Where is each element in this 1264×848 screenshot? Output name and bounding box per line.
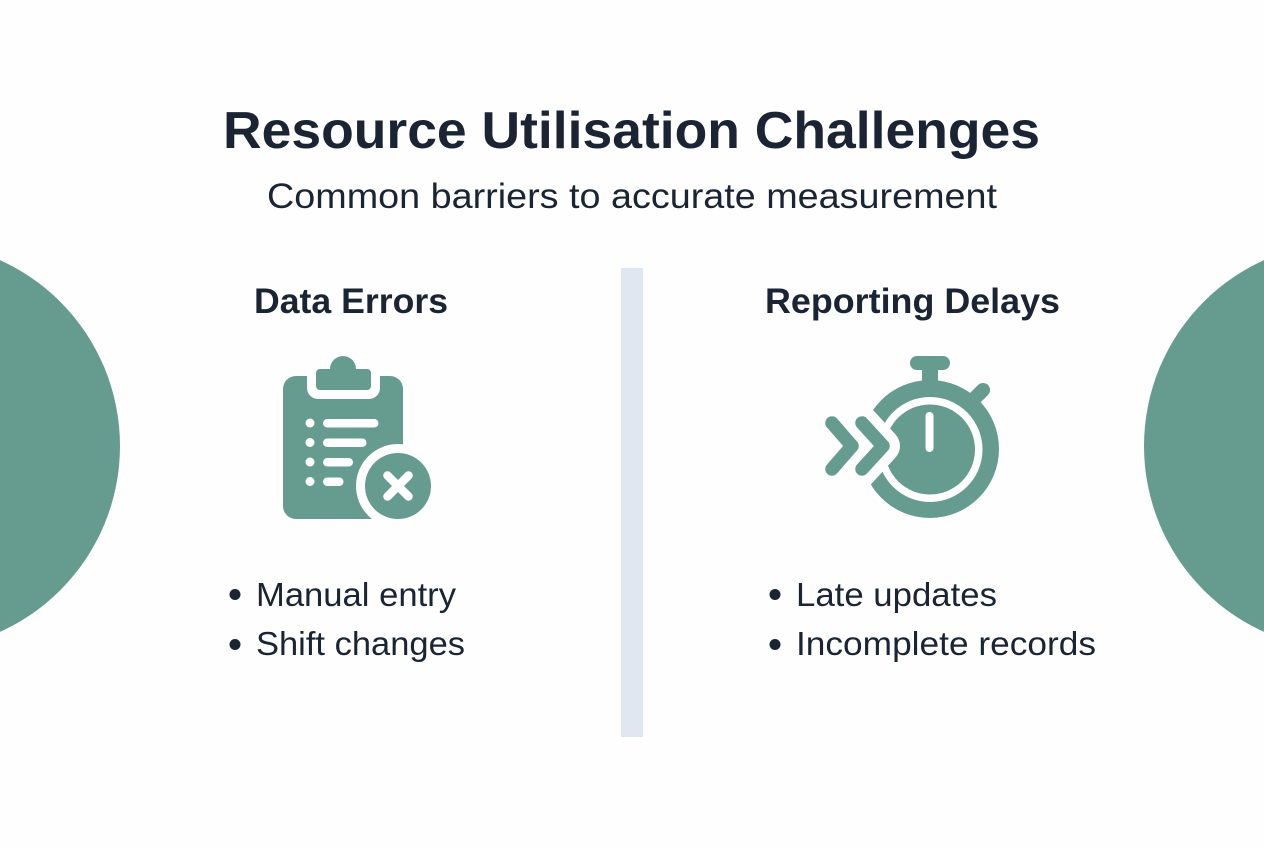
panel: data errors xyxy=(230,282,465,662)
bullet list: data errors xyxy=(230,576,465,662)
left decorative circle xyxy=(0,242,120,650)
central divider xyxy=(621,268,643,737)
bullet list: reporting delays xyxy=(770,576,1096,662)
right decorative circle xyxy=(1144,242,1264,650)
heading: data errors: Data Errors xyxy=(254,282,448,321)
panel: reporting delays xyxy=(765,282,1096,662)
icon: stopwatch with chevrons xyxy=(832,356,999,518)
bullet list: data errors: Shift changes xyxy=(256,625,465,662)
bullet list: data errors: Manual entry xyxy=(256,576,457,613)
subtitle: Common barriers to accurate measurement xyxy=(267,177,997,216)
heading: reporting delays: Reporting Delays xyxy=(765,282,1060,321)
title: Resource Utilisation Challenges xyxy=(223,102,1040,160)
bullet list: reporting delays: Late updates xyxy=(796,576,997,613)
icon: clipboard with error mark xyxy=(283,356,440,528)
bullet list: reporting delays: Incomplete records xyxy=(796,625,1096,662)
